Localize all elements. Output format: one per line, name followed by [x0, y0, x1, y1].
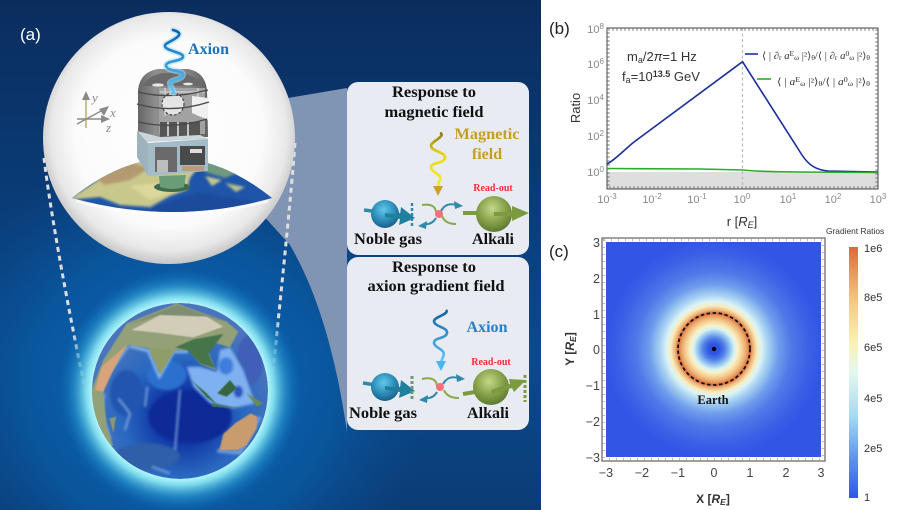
legend: gradient ratio: 0	[845, 50, 850, 58]
green curve	[607, 168, 878, 172]
y tick labels: 2	[593, 272, 600, 286]
frame with ticks	[607, 28, 878, 189]
panel: response to magnetic field	[347, 82, 529, 255]
icon: interaction cross	[418, 201, 463, 229]
icon: noble gas spin	[364, 200, 415, 228]
legend: amplitude ratio: a	[838, 77, 844, 88]
x axis title: r [R	[727, 214, 748, 229]
icon: coordinate axes: y	[90, 90, 98, 105]
y axis title: ]	[563, 332, 577, 336]
legend: gradient ratio: r	[779, 54, 782, 62]
label: alkali: Alkali	[467, 405, 510, 422]
color bar labels: 1	[864, 492, 870, 504]
annotation: parameters: 13.5	[653, 69, 670, 79]
label: earth: Earth	[697, 393, 729, 407]
x tick labels: 2	[783, 466, 790, 480]
heading: Response to	[392, 84, 476, 101]
x tick labels: 10	[825, 194, 837, 206]
label: noble gas: Noble gas	[349, 405, 417, 422]
y tick labels: 6	[600, 57, 605, 66]
dotted zoom line right	[270, 143, 295, 402]
color bar labels: 1e6	[864, 243, 882, 255]
annotation: parameters: m	[627, 49, 638, 64]
legend: amplitude ratio: E	[795, 76, 800, 84]
color bar labels	[864, 243, 882, 504]
y tick labels: 8	[600, 22, 605, 31]
legend: gradient ratio: ⟨ | ∂	[762, 51, 778, 62]
x tick labels: 0	[711, 466, 718, 480]
landmass	[90, 303, 263, 450]
x axis title: E	[720, 497, 726, 507]
earth outline dashed	[678, 313, 750, 385]
x tick labels: 1	[747, 466, 754, 480]
x tick labels: −2	[635, 466, 649, 480]
y tick labels: −2	[586, 415, 600, 429]
icon: coordinate axes: x	[109, 105, 116, 120]
y tick labels: 10	[587, 95, 600, 107]
y tick labels: 10	[587, 59, 600, 71]
x tick labels: -2	[655, 192, 662, 201]
chart: gradient ratio heat map	[563, 236, 825, 507]
panel: response to axion gradient field: axion gradient field	[368, 278, 505, 295]
shelves and ridges	[102, 346, 260, 473]
legend: amplitude ratio: ⟨ | a	[777, 77, 795, 88]
legend: gradient ratio: a	[782, 51, 790, 62]
light beam from bubble to response panels	[200, 88, 347, 432]
y axis title: Y [R	[563, 342, 577, 366]
y tick labels	[587, 22, 605, 179]
label: panel b: (b)	[549, 19, 570, 38]
icon: detector instrument	[137, 69, 209, 176]
icon: axion wave	[434, 310, 447, 371]
legend: gradient ratio: r	[835, 54, 838, 62]
color bar labels: 6e5	[864, 342, 882, 354]
x tick labels: 1	[792, 192, 797, 201]
y tick labels: 3	[593, 236, 600, 250]
legend: gradient ratio: /⟨ | ∂	[815, 51, 835, 62]
y tick labels: −3	[586, 451, 600, 465]
annotation: parameters	[622, 49, 700, 85]
label: noble gas: Noble gas	[354, 231, 422, 248]
panel: response to magnetic field: field	[472, 146, 502, 163]
x tick labels: 10	[597, 194, 610, 206]
legend: amplitude ratio: |²⟩	[853, 77, 866, 88]
x tick labels: 3	[882, 192, 887, 201]
panel: response to axion gradient field	[347, 257, 529, 430]
legend: amplitude ratio: |²⟩	[805, 77, 819, 88]
color bar labels: 2e5	[864, 443, 882, 455]
panel: dark blue background of illustration	[0, 0, 541, 510]
legend: color bar	[826, 226, 884, 504]
legend: gradient ratio: ω	[849, 54, 855, 62]
x axis title: ]	[726, 492, 730, 506]
legend: amplitude ratio: θ	[819, 80, 823, 88]
legend: gradient ratio: θ	[866, 54, 871, 62]
icon: coordinate axes: z	[105, 120, 111, 135]
color bar labels: 8e5	[864, 292, 882, 304]
x axis title: X [R	[696, 492, 720, 506]
label: panel c: (c)	[549, 242, 569, 261]
panel: response to magnetic field: magnetic field	[384, 104, 484, 121]
y tick labels: 2	[600, 129, 605, 138]
x tick labels: −1	[671, 466, 685, 480]
color bar labels: 4e5	[864, 393, 882, 405]
annotation: parameters: f	[622, 69, 626, 84]
legend: gradient ratio	[745, 50, 871, 62]
y tick labels: −1	[586, 379, 600, 393]
y tick labels: 10	[587, 24, 600, 36]
x tick labels	[599, 466, 825, 480]
legend: amplitude ratio: ω	[848, 80, 854, 88]
x tick labels: 10	[870, 194, 882, 206]
icon: coordinate axes	[77, 90, 116, 135]
x axis title: E	[748, 220, 755, 230]
annotation: parameters: a	[626, 75, 631, 85]
x axis title: ]	[754, 214, 757, 229]
dotted zoom line left	[44, 158, 88, 402]
legend: gradient ratio: E	[790, 50, 794, 58]
y tick labels: 1	[593, 308, 600, 322]
y axis title: Ratio	[568, 93, 583, 123]
icon: noble gas spin	[363, 373, 415, 401]
icon: alkali spin	[463, 196, 529, 232]
x tick labels: 2	[837, 192, 842, 201]
legend: amplitude ratio: 0	[844, 76, 848, 84]
x tick labels	[597, 192, 887, 206]
legend: gradient ratio: a	[837, 51, 845, 62]
y tick labels: 0	[593, 343, 600, 357]
annotation: parameters: a	[638, 55, 643, 65]
y tick labels: 0	[600, 165, 605, 174]
label: axion: Axion	[466, 319, 508, 336]
annotation: parameters: GeV	[670, 69, 700, 84]
label: read-out: Read-out	[473, 183, 513, 194]
legend: amplitude ratio	[757, 76, 871, 88]
y tick labels: 10	[587, 131, 600, 143]
green pedestal	[154, 175, 190, 192]
legend: gradient ratio: |²⟩	[854, 51, 866, 62]
x tick labels: −3	[599, 466, 613, 480]
legend: amplitude ratio: ω	[800, 80, 806, 88]
legend: amplitude ratio: θ	[866, 80, 871, 88]
label: magnetic field: Magnetic	[454, 126, 520, 143]
x tick labels: 10	[687, 194, 700, 206]
earth cap under detector	[72, 162, 272, 212]
white rim under earth cap	[76, 201, 268, 214]
x tick labels: -3	[610, 192, 617, 201]
label: panel a: (a)	[20, 25, 41, 44]
label: alkali: Alkali	[472, 231, 515, 248]
y tick labels	[586, 236, 600, 465]
icon: magnetic wave	[431, 133, 445, 196]
illustration: earth globe with glow	[58, 269, 302, 510]
icon: interaction cross	[419, 374, 465, 403]
x tick labels: 10	[734, 194, 746, 206]
blue curve	[607, 62, 878, 172]
x tick labels: 10	[642, 194, 655, 206]
x tick labels: -1	[700, 192, 707, 201]
earth center dot	[712, 347, 716, 351]
chart: ratio versus radius	[568, 22, 887, 230]
icon: alkali spin	[463, 369, 526, 405]
x tick labels: 10	[780, 194, 792, 206]
legend: amplitude ratio: /⟨ |	[822, 77, 838, 88]
color bar title: Gradient Ratios	[826, 226, 884, 236]
x tick labels: 0	[746, 192, 751, 201]
legend: gradient ratio: θ	[811, 54, 816, 62]
y axis title: E	[568, 336, 578, 342]
illustration: zoom bubble with detector	[43, 12, 295, 264]
x tick labels: 3	[818, 466, 825, 480]
annotation: parameters: =10	[631, 69, 653, 84]
icon: axion wave	[165, 30, 183, 93]
heading: Response to	[392, 259, 476, 276]
equipment frame	[137, 131, 209, 142]
y tick labels: 10	[587, 167, 600, 179]
y tick labels: 4	[600, 93, 605, 102]
label: axion: Axion	[188, 41, 229, 58]
annotation: parameters: /2	[643, 49, 654, 64]
label: read-out: Read-out	[471, 357, 511, 368]
legend: gradient ratio: |²⟩	[799, 51, 811, 62]
legend: gradient ratio: ω	[794, 54, 800, 62]
annotation: parameters: π=1 Hz	[654, 49, 697, 64]
